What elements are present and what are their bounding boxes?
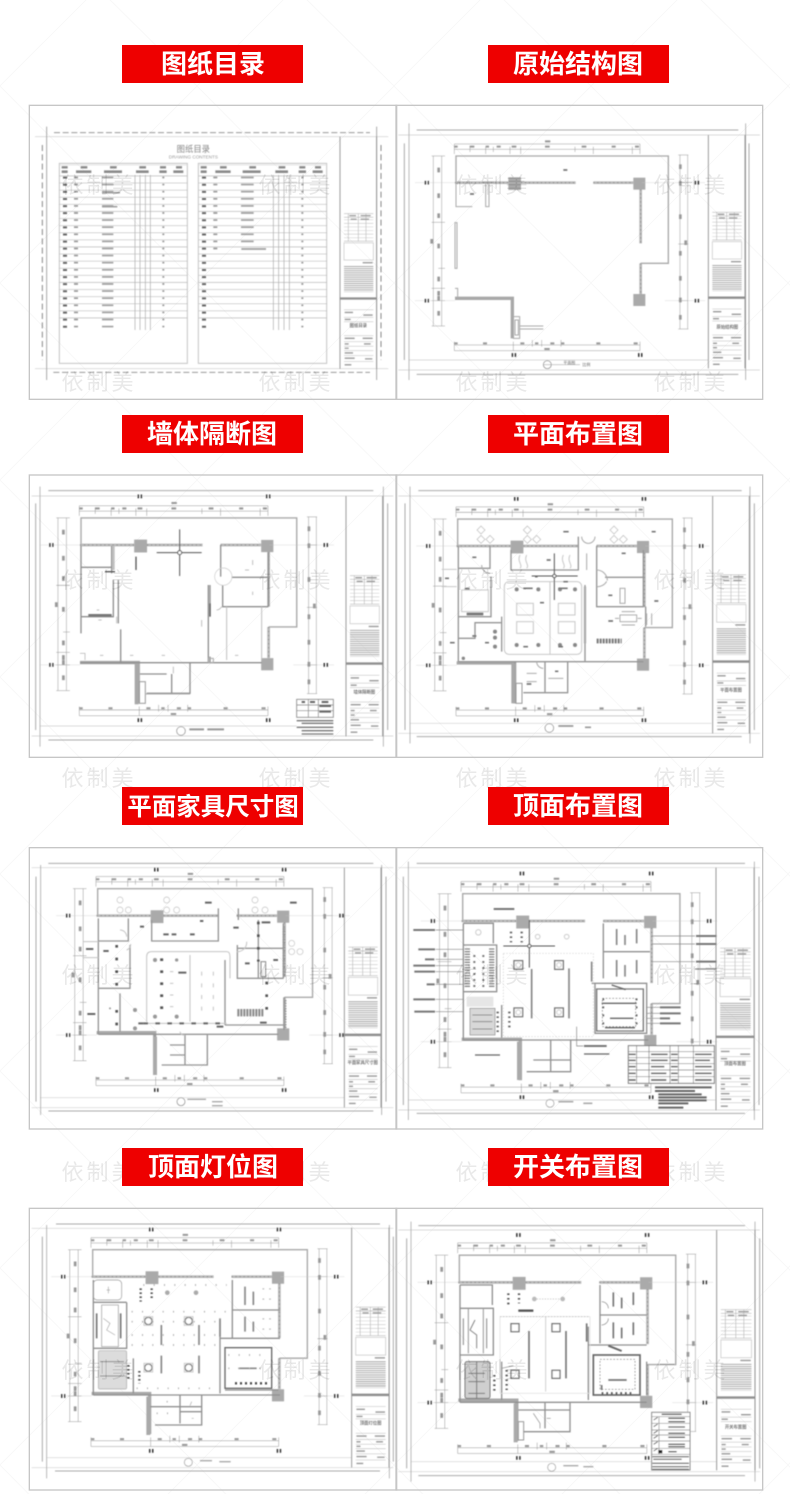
panel: floor layout plan xyxy=(396,475,763,757)
sub-title: 图纸目录 DRAWING CONTENTS: 图纸目录 xyxy=(177,144,210,154)
watermarks: 依制美: 依制美 xyxy=(653,761,729,793)
watermarks: 依制美: 依制美 xyxy=(653,1155,729,1187)
plan: ceiling lights xyxy=(145,1317,192,1371)
callouts: left leaders xyxy=(436,930,695,1046)
watermarks: 依制美: 依制美 xyxy=(61,365,137,397)
panel: original structure plan: 原始结构图 xyxy=(717,323,739,330)
legend table xyxy=(628,1046,714,1083)
panel: ceiling lighting plan: 顶面灯位图 xyxy=(360,1419,382,1426)
watermarks: 依制美: 依制美 xyxy=(455,1155,531,1187)
heading: 原始结构图: 原始结构图 xyxy=(513,44,643,81)
panel: wall partition plan xyxy=(29,475,397,757)
watermarks: 依制美: 依制美 xyxy=(61,1353,137,1385)
heading: 顶面布置图 xyxy=(488,786,669,825)
legend table xyxy=(297,699,333,734)
watermarks: 依制美: 依制美 xyxy=(61,168,137,200)
heading: 图纸目录: 图纸目录 xyxy=(161,44,265,81)
watermarks: 依制美: 依制美 xyxy=(653,365,729,397)
watermarks: 依制美: 依制美 xyxy=(258,958,334,990)
watermarks: 依制美: 依制美 xyxy=(455,958,531,990)
watermarks: 依制美: 依制美 xyxy=(455,1353,531,1385)
plan: interior partitions xyxy=(80,545,268,693)
plan: open office xyxy=(83,930,247,1035)
watermarks: 依制美: 依制美 xyxy=(258,168,334,200)
plan: rooms and walls xyxy=(98,908,285,1075)
panel: drawing contents sheet xyxy=(29,105,397,399)
panel: floor layout plan: 平面布置图 xyxy=(720,686,742,693)
watermarks: 依制美: 依制美 xyxy=(258,365,334,397)
plan: meeting table and sofa xyxy=(482,537,652,668)
heading: 平面家具尺寸图: 平面家具尺寸图 xyxy=(127,788,299,823)
panel: wall partition plan: 墙体隔断图 xyxy=(354,688,376,695)
sub-title: 图纸目录 DRAWING CONTENTS xyxy=(169,144,218,160)
panel: ceiling layout plan: 顶面布置图 xyxy=(724,1060,746,1067)
plan: rooms xyxy=(93,1280,280,1425)
panel: drawing contents sheet: 图纸目录 xyxy=(350,322,368,329)
heading: 墙体隔断图 xyxy=(122,414,303,453)
panel: original structure plan: 平面图 xyxy=(563,359,575,366)
plan: crosshair xyxy=(532,553,578,600)
panel: ceiling lighting plan xyxy=(29,1208,397,1490)
heading: 平面布置图: 平面布置图 xyxy=(513,414,643,451)
watermarks: 依制美: 依制美 xyxy=(258,1155,334,1187)
watermarks: 依制美: 依制美 xyxy=(258,761,334,793)
heading: 墙体隔断图: 墙体隔断图 xyxy=(147,414,277,451)
plan: shaded ceilings xyxy=(470,1008,495,1035)
plan: dimension markers xyxy=(157,958,166,1018)
heading: 顶面布置图: 顶面布置图 xyxy=(513,786,643,823)
heading: 平面布置图 xyxy=(488,414,669,453)
watermarks: 依制美: 依制美 xyxy=(653,563,729,595)
panel: original structure plan xyxy=(396,105,763,399)
heading: 开关布置图: 开关布置图 xyxy=(513,1147,643,1184)
panel: original structure plan: 比例 xyxy=(582,361,590,368)
plan: left partial rooms and shaft xyxy=(455,183,543,338)
watermarks: 依制美: 依制美 xyxy=(455,563,531,595)
plan: ceiling lights and bars xyxy=(514,961,563,1017)
plan: open office with desks xyxy=(442,555,582,654)
heading: 原始结构图 xyxy=(488,44,669,83)
plan: rooms and walls xyxy=(458,537,646,703)
watermarks: 依制美: 依制美 xyxy=(258,563,334,595)
heading: 图纸目录 xyxy=(122,44,303,83)
heading: 开关布置图 xyxy=(488,1147,669,1186)
panel: switch layout plan: 开关布置图 xyxy=(725,1423,747,1430)
watermarks: 依制美: 依制美 xyxy=(61,958,137,990)
sub-title: 图纸目录 DRAWING CONTENTS: DRAWING CONTENTS xyxy=(169,155,218,160)
plan: crosshair xyxy=(157,529,202,576)
heading: 顶面灯位图 xyxy=(122,1147,303,1186)
watermarks: 依制美: 依制美 xyxy=(61,761,137,793)
watermarks: 依制美: 依制美 xyxy=(455,761,531,793)
plan: rooms xyxy=(463,923,650,1072)
plan: rooms xyxy=(460,1285,647,1432)
notes xyxy=(655,1087,712,1108)
watermarks: 依制美: 依制美 xyxy=(653,958,729,990)
panel: switch layout plan xyxy=(396,1208,763,1490)
watermarks: 依制美: 依制美 xyxy=(653,168,729,200)
panel: ceiling layout plan xyxy=(396,848,763,1129)
heading: 顶面灯位图: 顶面灯位图 xyxy=(148,1147,278,1184)
plan: balcony diamonds xyxy=(477,526,627,543)
watermarks: 依制美: 依制美 xyxy=(258,1353,334,1385)
plan: lights and bars xyxy=(511,1324,560,1378)
watermarks: 依制美: 依制美 xyxy=(455,168,531,200)
legend table xyxy=(652,1412,690,1470)
panel: furniture dimension plan xyxy=(29,848,397,1129)
watermarks: 依制美 xyxy=(61,168,729,1385)
watermarks: 依制美: 依制美 xyxy=(455,365,531,397)
plan: balcony circles xyxy=(117,897,303,955)
watermarks: 依制美: 依制美 xyxy=(61,1155,137,1187)
watermarks: 依制美: 依制美 xyxy=(61,563,137,595)
panel: furniture dimension plan: 平面家具尺寸图 xyxy=(348,1059,378,1066)
watermarks: 依制美: 依制美 xyxy=(653,1353,729,1385)
